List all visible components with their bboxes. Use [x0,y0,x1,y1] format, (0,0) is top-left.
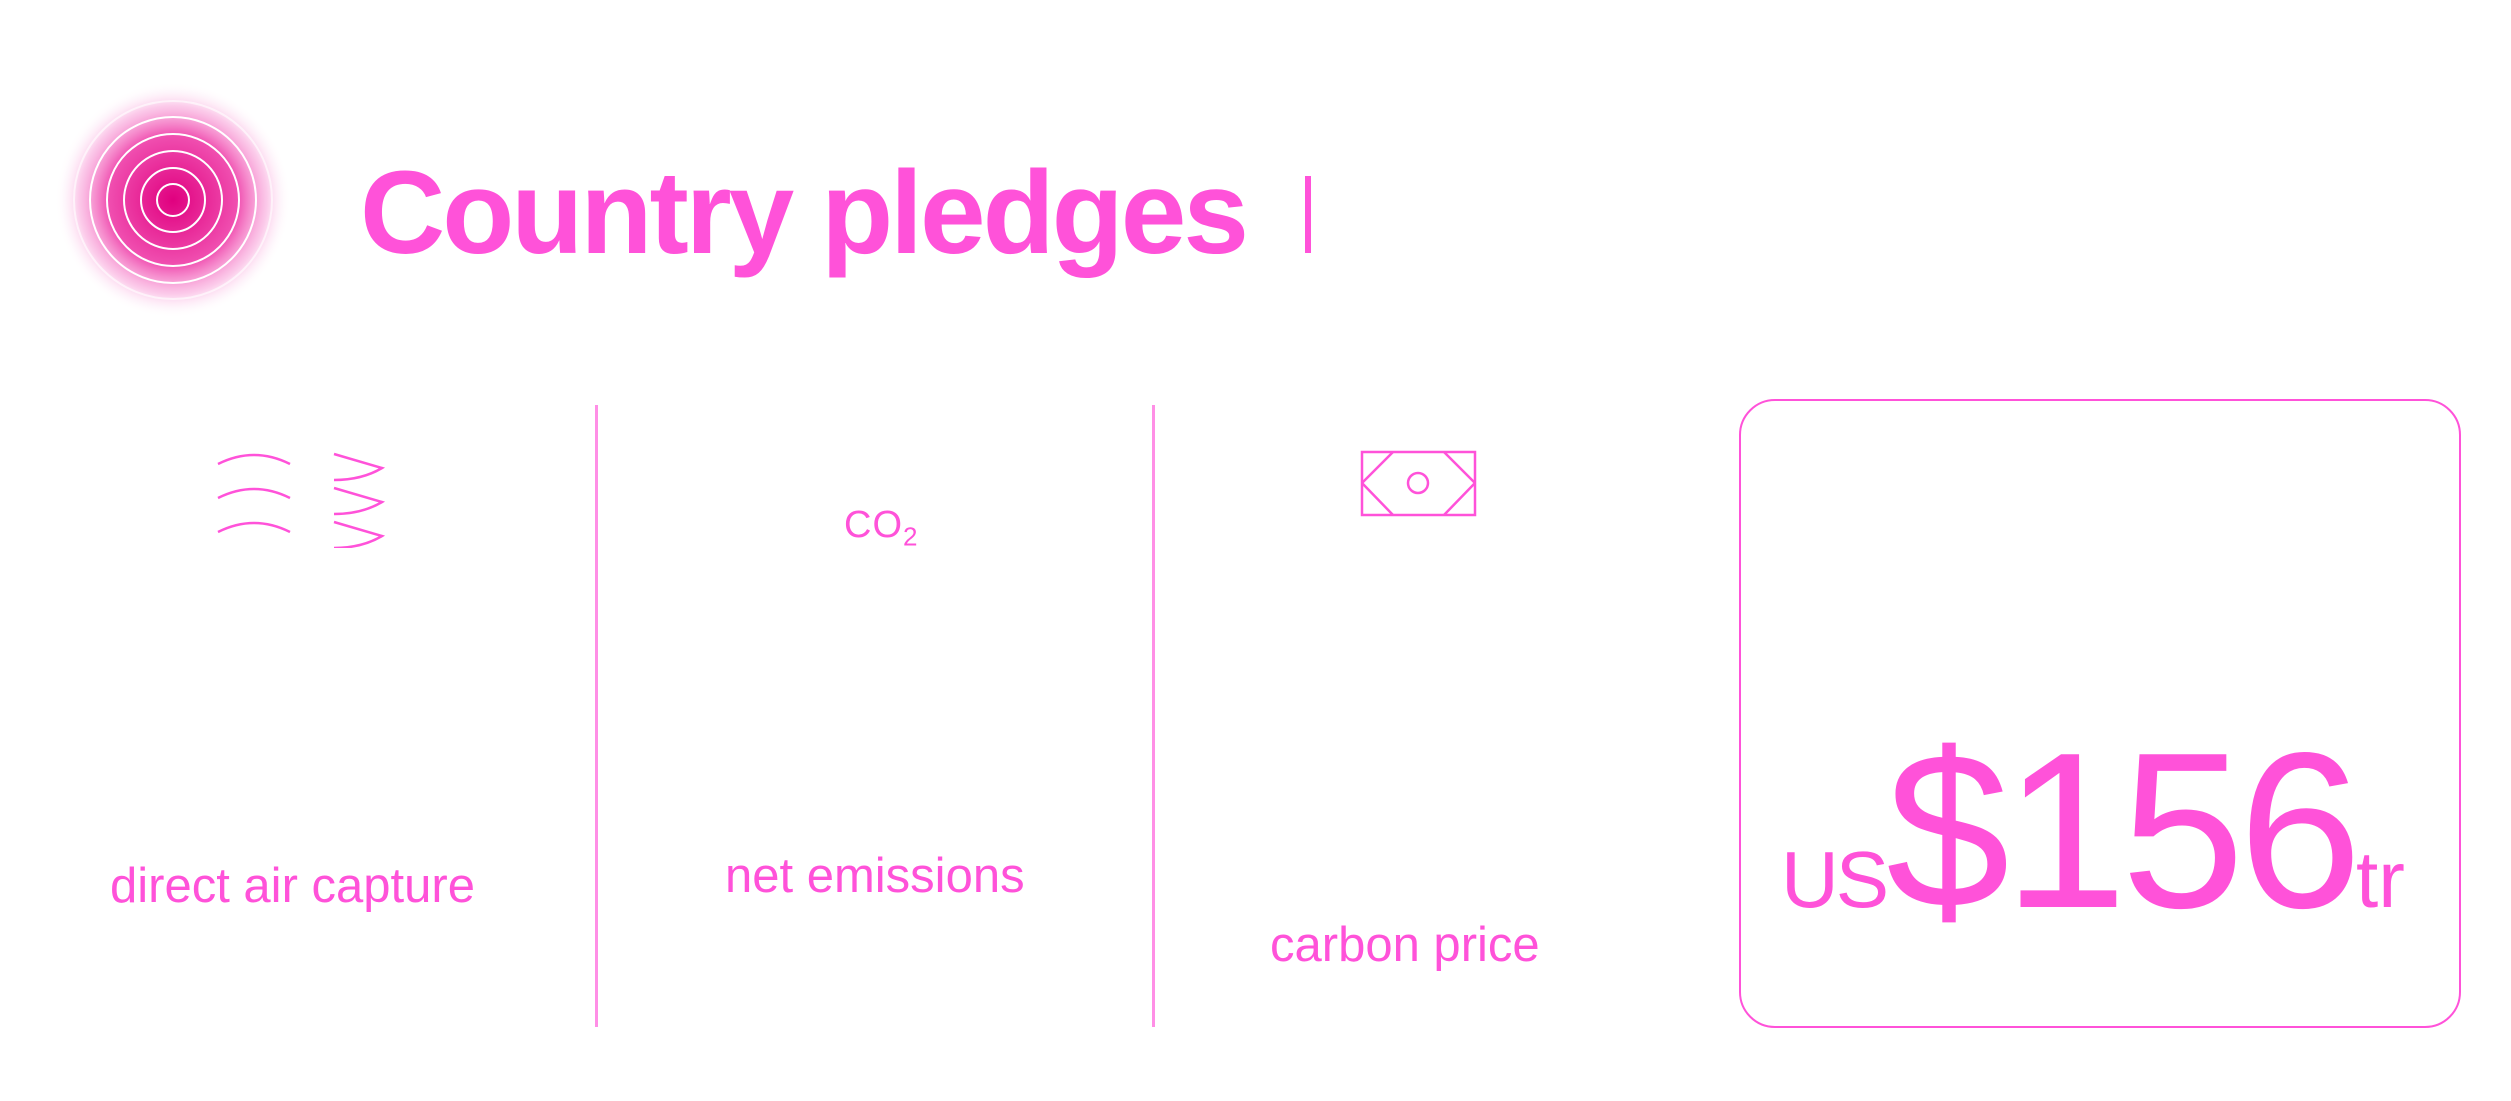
panel: direct air capture [110,452,475,913]
panel: carbon price [1270,450,1540,972]
cursor bar [1305,176,1311,253]
big number: US$156tr [1781,707,2405,955]
label: net emissions [725,849,1025,903]
icon: air flow [218,452,385,548]
title: Country pledges [360,147,1246,279]
label: direct air capture [110,859,475,913]
dividers [595,405,598,1027]
label: carbon price [1270,918,1540,972]
panel: net emissions [725,504,1025,903]
icon: CO2: CO2 [844,504,918,552]
icon: banknote [1360,450,1476,516]
panel: total value box [1739,399,2461,1028]
icon: concentric target [64,92,282,308]
